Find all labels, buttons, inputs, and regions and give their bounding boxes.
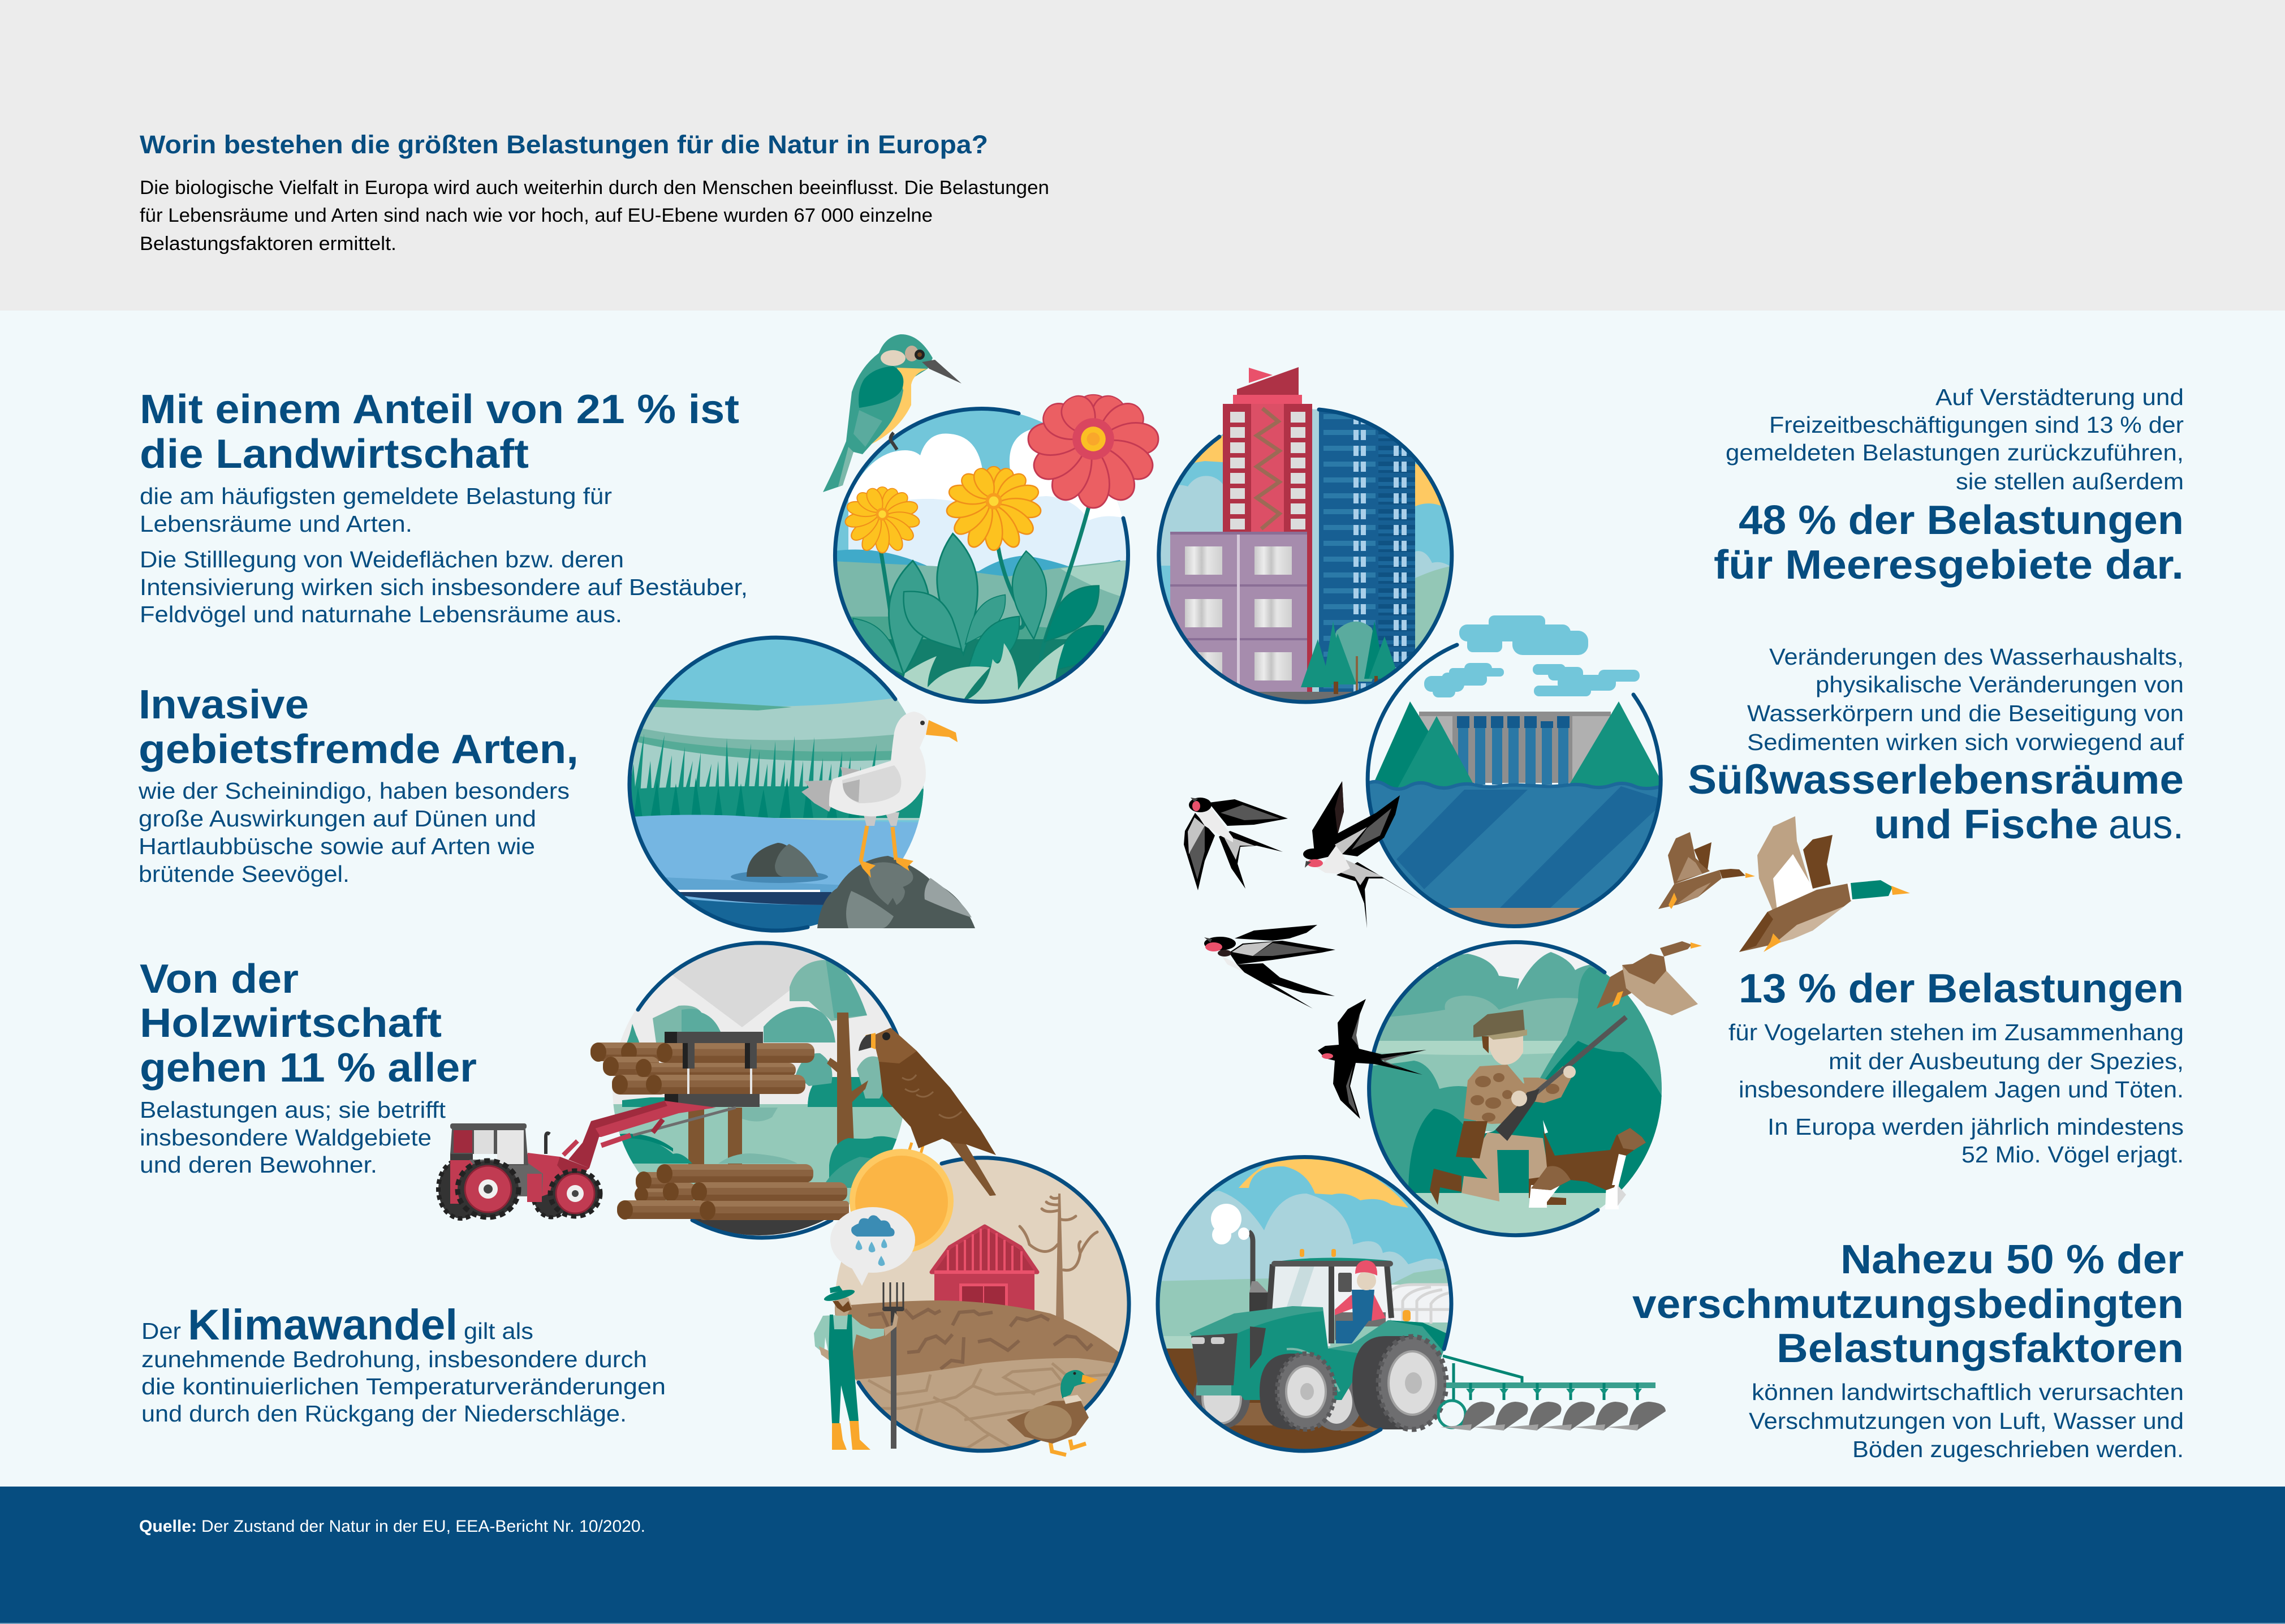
lower forest logs [617, 1164, 849, 1220]
reservoir water [1363, 782, 1669, 933]
icon: plough [1438, 1356, 1666, 1431]
circle scene: flowers and kingfisher [823, 334, 1159, 704]
text block: urbanisation: Auf Verstädterung und [1935, 384, 2184, 410]
text block: water bodies: und Fische [1874, 802, 2098, 847]
swallow 1 [1184, 798, 1288, 890]
blue tower [1319, 407, 1415, 701]
text block: pollution: Nahezu 50 % der [1840, 1237, 2184, 1282]
text block: forestry: gehen 11 % aller [140, 1045, 477, 1091]
hunter bag [1456, 1121, 1488, 1158]
text block: invasive species: Hartlaubbüsche sowie auf Arten wie [139, 833, 535, 859]
icon: seagull [801, 712, 958, 878]
text block: hunting: 13 % der Belastungen [1739, 966, 2184, 1011]
text block: water bodies: Sedimenten wirken sich vorwiegend auf [1747, 729, 2184, 755]
text block: pollution [1632, 1237, 2184, 1462]
text block: agriculture: die am häufigsten gemeldete Belastung für [140, 483, 612, 509]
circle scene: forest [438, 928, 911, 1242]
icon: four swallows [1184, 781, 1426, 1119]
text block: pollution: können landwirtschaftlich verursachten [1752, 1379, 2184, 1405]
driver [1335, 1260, 1386, 1343]
icon: mallard duck walking [1007, 1370, 1098, 1455]
circle scene: drought and farm [814, 1028, 1131, 1455]
mountains [1371, 701, 1666, 789]
text block: water bodies [1688, 644, 2184, 847]
circle scene: green tractor [1154, 1153, 1666, 1454]
text block: urbanisation: Freizeitbeschäftigungen sind 13 % der [1769, 412, 2184, 438]
icon: red forestry tractor [438, 1101, 736, 1218]
rocks under gull [817, 856, 975, 928]
text block: water bodies: Süßwasserlebensräume [1688, 757, 2184, 803]
source note: Der Zustand der Natur in der EU, EEA-Bericht Nr. 10/2020. [201, 1517, 645, 1536]
far wheels [1193, 1367, 1250, 1429]
intro text: für Lebensräume und Arten sind nach wie vor hoch, auf EU-Ebene wurden 67 000 einzelne [140, 205, 933, 226]
text block: agriculture: Mit einem Anteil von 21 % ist [140, 387, 739, 432]
text block: invasive species: gebietsfremde Arten, [139, 727, 579, 772]
text block: climate change: gilt als [464, 1318, 533, 1344]
text block: climate change [141, 1301, 666, 1427]
text block: agriculture: Feldvögel und naturnahe Lebensräume aus. [140, 601, 622, 627]
circle scene: coast and seagull [622, 634, 975, 939]
swallow 4 [1318, 999, 1426, 1119]
text block: hunting: für Vogelarten stehen im Zusammenhang [1728, 1019, 2184, 1045]
text block: forestry: insbesondere Waldgebiete [140, 1125, 432, 1151]
text block: hunting: insbesondere illegalem Jagen und Töten. [1739, 1076, 2184, 1102]
cracked soil [831, 1300, 1126, 1397]
circle scene: dam [1363, 615, 1669, 933]
text block: invasive species: brütende Seevögel. [139, 861, 350, 887]
tractor cab [1269, 1249, 1393, 1346]
text block: water bodies: aus. [2109, 802, 2184, 847]
text block: agriculture: die Landwirtschaft [140, 432, 529, 477]
text block: urbanisation: sie stellen außerdem [1956, 468, 2184, 494]
text block: hunting: In Europa werden jährlich mindestens [1767, 1114, 2184, 1140]
text block: climate change: zunehmende Bedrohung, insbesondere durch [141, 1346, 647, 1372]
text block: invasive species: große Auswirkungen auf Dünen und [139, 805, 536, 832]
text block: urbanisation: 48 % der Belastungen [1739, 498, 2184, 543]
icon: hunting dog [1529, 1120, 1646, 1209]
icon: hawk [859, 1028, 996, 1196]
source note: Quelle: [139, 1517, 197, 1536]
red tower [1223, 367, 1312, 540]
text block: forestry: und deren Bewohner. [140, 1152, 377, 1178]
text block: climate change: Der [141, 1318, 181, 1344]
leaves [852, 532, 1104, 675]
reeds [628, 734, 933, 818]
swallow 3 [1204, 925, 1335, 1009]
text block: forestry: Von der [140, 957, 299, 1002]
text block: hunting [1728, 966, 2184, 1168]
text block: climate change: die kontinuierlichen Temperaturveränderungen [141, 1373, 666, 1399]
text block: forestry: Belastungen aus; sie betrifft [140, 1097, 446, 1123]
header band [0, 0, 2285, 311]
icon: farmer with pitchfork [814, 1282, 904, 1450]
footer band [0, 1487, 2285, 1624]
circle scene: city buildings [1154, 367, 1454, 704]
small rock in water [731, 843, 828, 883]
clouds above dam [1424, 615, 1640, 697]
text block: urbanisation: gemeldeten Belastungen zurückzuführen, [1726, 440, 2184, 466]
text block: water bodies: Wasserkörpern und die Beseitigung von [1747, 700, 2184, 726]
text block: urbanisation [1714, 384, 2184, 588]
text block: forestry [140, 957, 477, 1178]
text block: pollution: verschmutzungsbedingten [1632, 1282, 2184, 1327]
tractor wheels [1260, 1336, 1446, 1429]
tractor body [1189, 1306, 1446, 1400]
yellow and red flowers [844, 390, 1159, 553]
text block: pollution: Belastungsfaktoren [1777, 1326, 2184, 1371]
intro text: Die biologische Vielfalt in Europa wird auch weiterhin durch den Menschen beeinflusst. Die Belastungen [140, 177, 1049, 199]
exhaust and smoke [1211, 1204, 1268, 1312]
text block: water bodies: physikalische Veränderungen von [1816, 671, 2184, 697]
swallow 2 [1303, 781, 1421, 928]
hunter figure [1430, 1010, 1626, 1205]
barn [932, 1226, 1037, 1312]
text block: water bodies: Veränderungen des Wasserhaushalts, [1769, 644, 2184, 670]
purple building [1170, 532, 1312, 696]
icon: sun [850, 1149, 954, 1253]
intro text [140, 177, 1049, 255]
callout: rain cloud bubble [830, 1207, 915, 1286]
text block: pollution: Böden zugeschrieben werden. [1852, 1436, 2184, 1462]
text block: hunting: 52 Mio. Vögel erjagt. [1961, 1141, 2184, 1168]
text block: climate change: Klimawandel [188, 1301, 458, 1349]
log grapple [665, 1032, 763, 1107]
dam wall [1419, 712, 1611, 785]
icon: kingfisher [823, 334, 962, 492]
text block: agriculture: Die Stilllegung von Weideflächen bzw. deren [140, 546, 624, 572]
bottom edge line [0, 1623, 2285, 1624]
text block: invasive species: wie der Scheinindigo, haben besonders [138, 778, 570, 804]
icon: flying ducks [1597, 816, 1910, 1015]
duck above hunter [1597, 941, 1702, 1015]
dead tree [1020, 1197, 1097, 1270]
title: Worin bestehen die größten Belastungen für die Natur in Europa? [140, 130, 988, 159]
text block: climate change: und durch den Rückgang der Niederschläge. [141, 1401, 627, 1427]
text block: agriculture: Intensivierung wirken sich insbesondere auf Bestäuber, [140, 574, 748, 600]
small brown duck [1658, 832, 1755, 909]
text block: invasive species: Invasive [139, 682, 309, 727]
mallard drake [1739, 816, 1910, 952]
stems [879, 507, 1090, 639]
intro text: Belastungsfaktoren ermittelt. [140, 233, 396, 255]
text block: agriculture: Lebensräume und Arten. [140, 511, 412, 537]
bushes [619, 1136, 905, 1188]
greenhouse [1390, 1285, 1454, 1324]
lifted logs [590, 1043, 814, 1095]
trees at tower base [1301, 621, 1399, 694]
text block: forestry: Holzwirtschaft [140, 1001, 442, 1046]
text block: urbanisation: für Meeresgebiete dar. [1714, 542, 2184, 588]
text block: agriculture [140, 387, 748, 627]
circle scene: hunter [1366, 939, 1669, 1239]
text block: pollution: Verschmutzungen von Luft, Wasser und [1749, 1408, 2184, 1434]
text block: hunting: mit der Ausbeutung der Spezies, [1829, 1048, 2184, 1074]
text block: invasive species [138, 682, 579, 887]
